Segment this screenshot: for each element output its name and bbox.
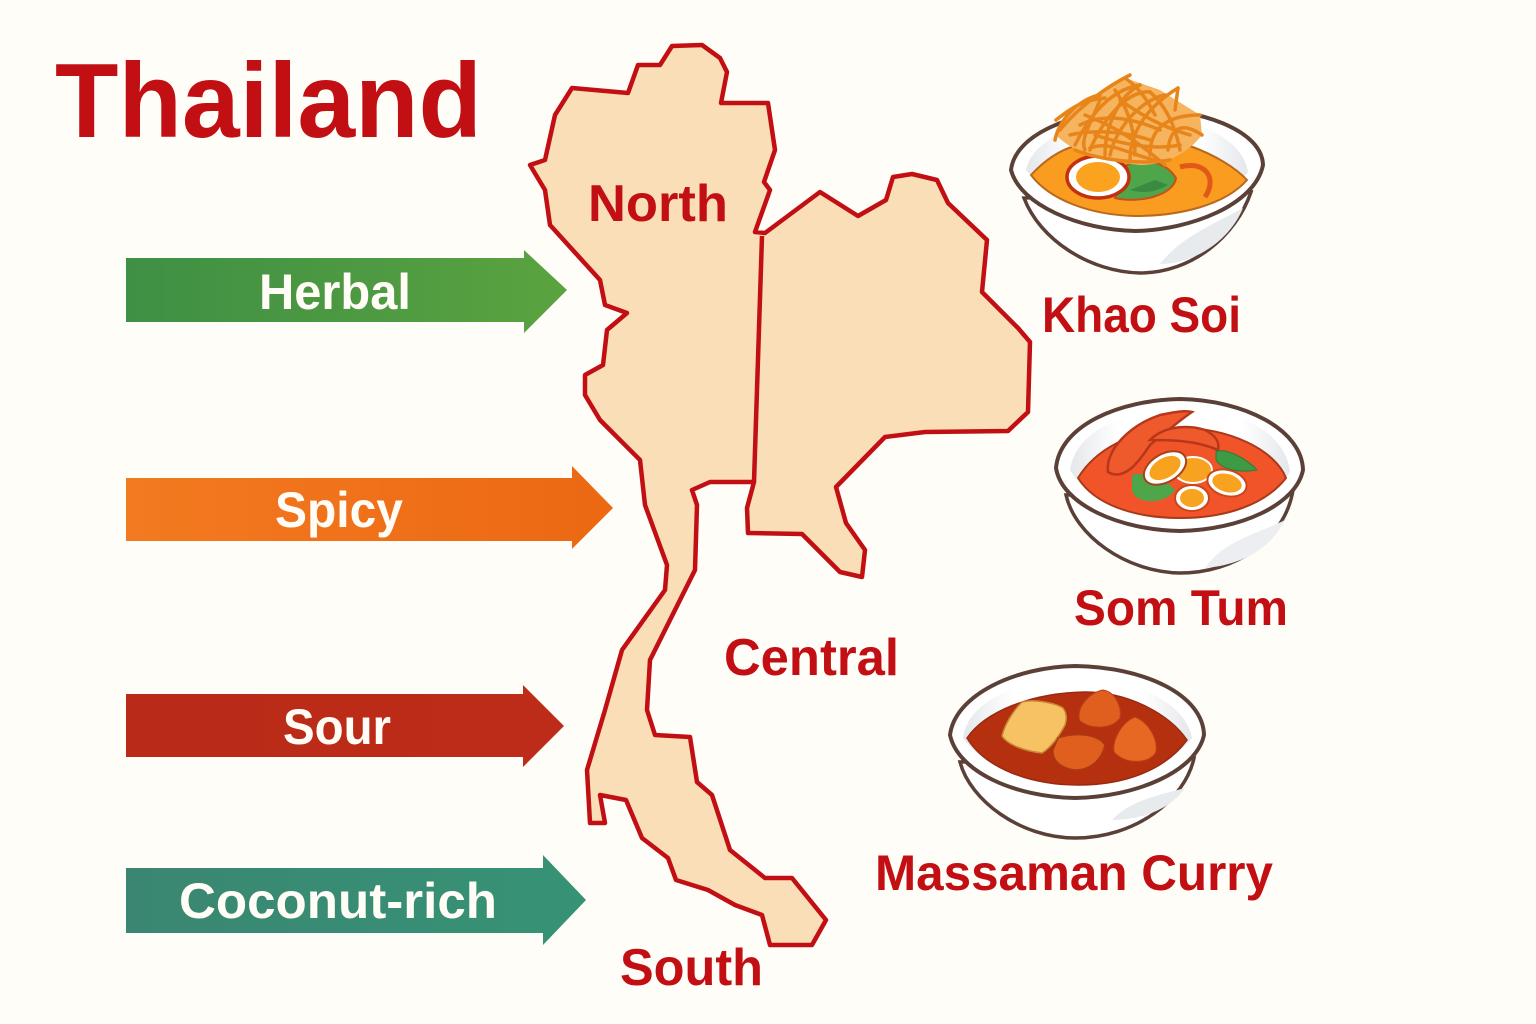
dish label: Som Tum: Som Tum: [1074, 580, 1288, 636]
dish label: Massaman Curry: Massaman Curry: [875, 845, 1273, 901]
arrow: Coconut-rich: [126, 855, 586, 945]
region label: Central: Central: [724, 629, 899, 687]
arrow: Herbal: Herbal: [259, 264, 411, 320]
region label: North: North: [588, 175, 728, 233]
arrow: Herbal: [126, 250, 567, 333]
arrow: Spicy: [126, 466, 613, 549]
dish: Som Tum bowl: [1056, 399, 1303, 573]
dish: Massaman Curry bowl: [950, 666, 1204, 838]
dish: Khao Soi bowl: [1011, 75, 1263, 273]
arrow: Spicy: Spicy: [275, 482, 403, 538]
region label: South: South: [620, 939, 763, 997]
dish label: Khao Soi: Khao Soi: [1042, 287, 1241, 343]
map of Thailand: [530, 45, 1030, 945]
arrow: Coconut-rich: Coconut-rich: [179, 873, 497, 929]
arrow: Sour: [126, 685, 564, 767]
arrow: Sour: Sour: [283, 699, 391, 755]
title: Thailand: [55, 42, 482, 160]
